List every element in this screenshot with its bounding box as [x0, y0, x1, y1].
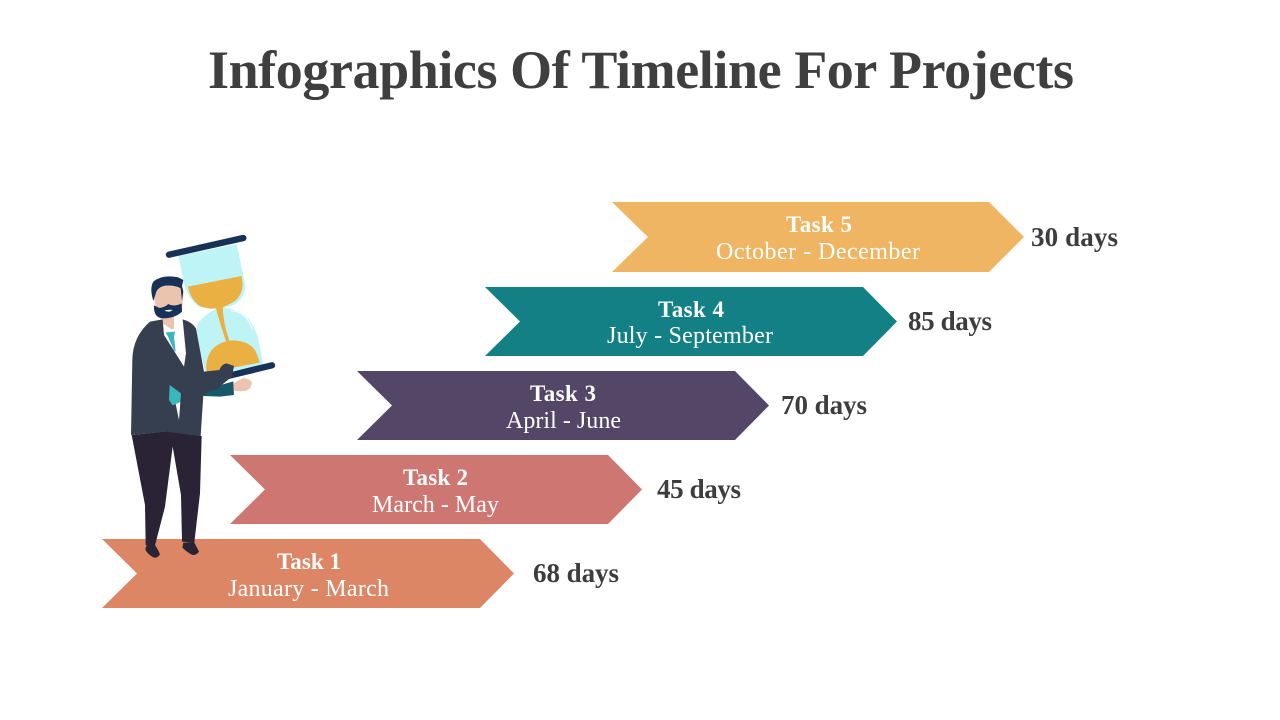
panel: task 5: October - December [716, 239, 920, 265]
label: task 4 duration: 85 days [908, 306, 992, 336]
icon: hourglass [169, 238, 272, 377]
panel: task 3 [357, 371, 769, 440]
panel: task 2: March - May [372, 492, 499, 518]
icon: man [131, 276, 252, 558]
label: task 5 duration: 30 days [1031, 222, 1118, 252]
icon: businessman holding hourglass [131, 238, 272, 558]
panel: task 3: April - June [506, 408, 621, 434]
panel: task 3: Task 3 [530, 381, 596, 406]
label: task 2 duration: 45 days [657, 474, 741, 504]
panel: task 5: Task 5 [786, 212, 852, 237]
panel: task 4: July - September [607, 323, 773, 349]
panel: task 4: Task 4 [658, 297, 724, 322]
panel: task 1: January - March [228, 576, 389, 602]
panel: task 2: Task 2 [403, 465, 468, 490]
label: task 3 duration: 70 days [781, 390, 867, 420]
title: Infographics Of Timeline For Projects [208, 40, 1074, 100]
panel: task 2 [230, 455, 642, 524]
panel: task 5 [612, 202, 1024, 272]
label: task 1 duration: 68 days [533, 558, 619, 588]
panel: task 1 [102, 539, 514, 608]
panel: task 4 [485, 287, 897, 356]
panel: task 1: Task 1 [277, 549, 341, 574]
